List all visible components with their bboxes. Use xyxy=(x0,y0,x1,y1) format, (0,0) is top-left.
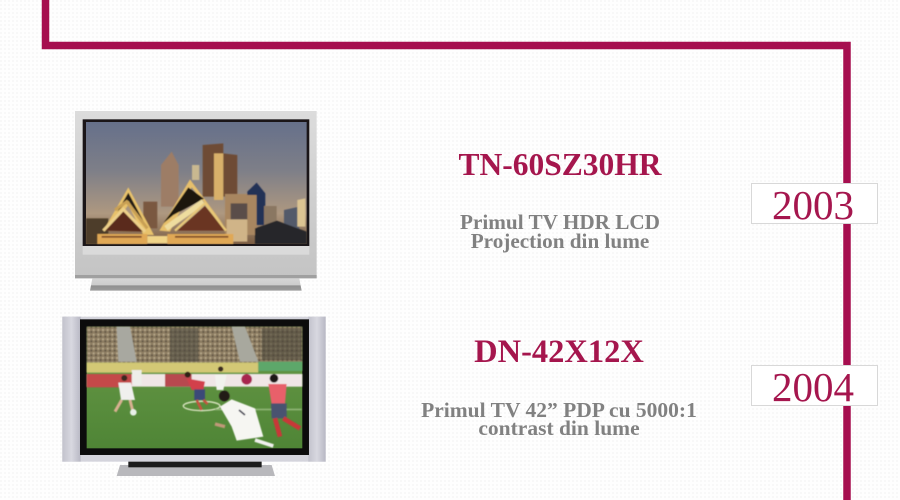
player red xyxy=(187,378,205,390)
opera house base xyxy=(97,234,147,244)
year badge: 2003: 2003 xyxy=(772,182,854,228)
year badge: 2004 xyxy=(752,364,878,410)
TV: DN-42X12X xyxy=(62,317,326,476)
screen image: Sydney skyline xyxy=(86,122,307,244)
description: TN-60SZ30HR: Primul TV HDR LCD xyxy=(460,210,660,234)
TV stand xyxy=(117,462,275,476)
model title: TN-60SZ30HR: TN-60SZ30HR xyxy=(458,147,663,182)
TV frame xyxy=(62,317,326,462)
player back xyxy=(132,370,142,385)
screen xyxy=(80,319,309,455)
description: DN-42X12X xyxy=(421,398,697,440)
description: TN-60SZ30HR: Projection din lume xyxy=(471,229,649,253)
screen image: football match xyxy=(87,327,302,448)
TV stand xyxy=(90,278,302,291)
opera house right xyxy=(159,179,225,232)
description: DN-42X12X: Primul TV 42” PDP cu 5000:1 xyxy=(421,398,697,422)
opera house left xyxy=(103,187,154,235)
player left xyxy=(118,383,135,400)
player foreground xyxy=(220,399,263,441)
TV frame xyxy=(75,111,317,278)
player right red xyxy=(268,384,287,404)
screen xyxy=(83,119,309,246)
model title: DN-42X12X: DN-42X12X xyxy=(474,334,644,370)
TV: TN-60SZ30HR xyxy=(75,111,317,291)
description: DN-42X12X: contrast din lume xyxy=(478,416,640,440)
year badge: 2004: 2004 xyxy=(772,364,854,410)
year badge: 2003 xyxy=(752,182,878,228)
description: TN-60SZ30HR xyxy=(460,210,660,253)
player center xyxy=(215,375,227,390)
